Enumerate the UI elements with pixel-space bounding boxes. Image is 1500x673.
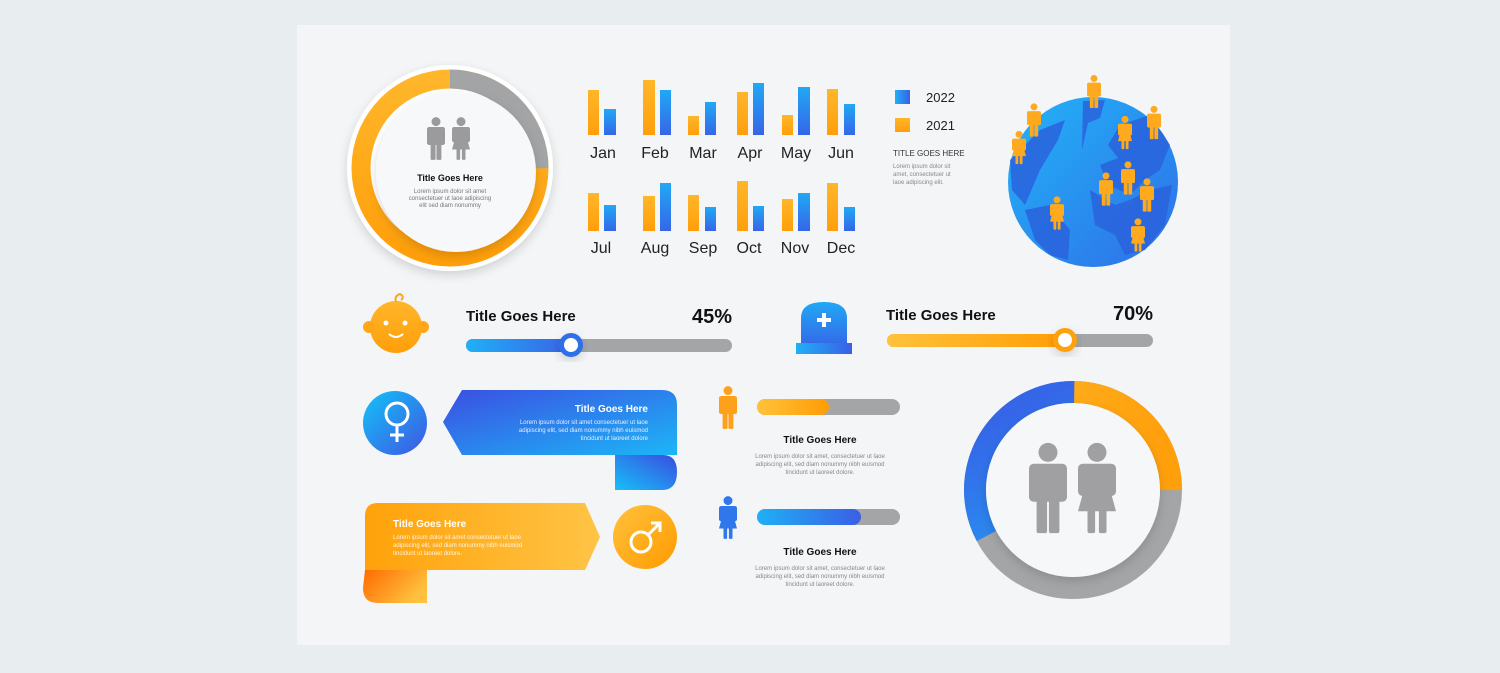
progress: male: Lorem ipsum dolor sit amet, consectetuer ut laoe bbox=[755, 454, 886, 460]
bar chart: Aug bbox=[641, 240, 669, 257]
bar chart: Jan bbox=[590, 145, 616, 162]
bar chart: Apr bbox=[738, 145, 763, 162]
banner: orange: adipiscing elit, sed diam nonummy nibh euismod bbox=[393, 543, 522, 549]
legend: 2022 bbox=[926, 90, 955, 105]
legend bbox=[893, 90, 965, 186]
icon: male symbol bbox=[613, 505, 677, 569]
card background bbox=[297, 25, 1230, 645]
text block: donut body bbox=[409, 189, 491, 209]
banner: blue: tincidunt ut laoreet dolore bbox=[581, 436, 649, 442]
icon: people bbox=[427, 117, 470, 160]
banner: orange: Lorem ipsum dolor sit amet consectetuer ut laoe bbox=[393, 535, 522, 541]
panel: large donut bbox=[940, 357, 1206, 623]
bar chart: Dec bbox=[827, 240, 855, 257]
banner: orange: Title Goes Here bbox=[393, 519, 467, 530]
bar chart: Jul bbox=[591, 240, 611, 257]
icon: large people bbox=[1029, 443, 1116, 533]
bar chart: Nov bbox=[781, 240, 809, 257]
slider: 45%: Title Goes Here bbox=[466, 308, 576, 325]
progress: female: Lorem ipsum dolor sit amet, consectetuer ut laoe bbox=[755, 566, 886, 572]
banner: blue: Title Goes Here bbox=[575, 404, 648, 415]
banner: orange bbox=[363, 503, 600, 603]
legend: 2021 bbox=[926, 118, 955, 133]
legend: TITLE GOES HERE bbox=[893, 149, 965, 158]
bar chart: Mar bbox=[689, 145, 717, 162]
banner: blue: adipiscing elit, sed diam nonummy nibh euismod bbox=[519, 428, 648, 434]
banner: blue bbox=[443, 390, 677, 490]
icon: baby face bbox=[363, 294, 429, 353]
slider: 70%: 70% bbox=[1113, 303, 1153, 325]
progress: female: adipiscing elit, sed diam nonummy nibh euismod bbox=[755, 574, 885, 580]
bar chart bbox=[588, 80, 855, 257]
bar chart: Jun bbox=[828, 145, 854, 162]
legend: laoe adipiscing elit. bbox=[893, 180, 944, 186]
heading: donut title: Title Goes Here bbox=[417, 173, 483, 183]
panel: top-left donut bbox=[347, 65, 553, 271]
icon: female symbol bbox=[363, 391, 427, 455]
globe with people bbox=[1008, 75, 1178, 267]
legend: amet, consectetuer ut bbox=[893, 172, 951, 178]
bar chart: Sep bbox=[689, 240, 717, 257]
slider: 45% bbox=[466, 306, 732, 357]
slider: 70%: Title Goes Here bbox=[886, 307, 996, 324]
progress: female: Title Goes Here bbox=[783, 547, 857, 558]
text block: donut body: elit sed diam nonummy bbox=[419, 203, 481, 209]
banner: orange: tincidunt ut laoreet dolore. bbox=[393, 551, 462, 557]
progress: male: Title Goes Here bbox=[783, 435, 857, 446]
banner: blue: Lorem ipsum dolor sit amet consectetuer ut laoe bbox=[520, 420, 649, 426]
bar chart: Oct bbox=[737, 240, 762, 257]
text block: donut body: Lorem ipsum dolor sit amet bbox=[414, 189, 487, 195]
progress: female: tincidunt ut laoreet dolore. bbox=[785, 582, 855, 588]
bar chart: Feb bbox=[641, 145, 669, 162]
slider: 70% bbox=[886, 303, 1153, 352]
progress: male: tincidunt ut laoreet dolore. bbox=[785, 470, 855, 476]
legend: Lorem ipsum dolor sit bbox=[893, 164, 951, 170]
icon: tombstone bbox=[796, 302, 852, 354]
slider: 45%: 45% bbox=[692, 306, 732, 328]
progress: female bbox=[719, 496, 900, 588]
progress: male: adipiscing elit, sed diam nonummy nibh euismod bbox=[755, 462, 885, 468]
progress: male bbox=[719, 386, 900, 476]
text block: donut body: consectetuer ut laoe adipiscing bbox=[409, 196, 491, 202]
bar chart: May bbox=[781, 145, 811, 162]
